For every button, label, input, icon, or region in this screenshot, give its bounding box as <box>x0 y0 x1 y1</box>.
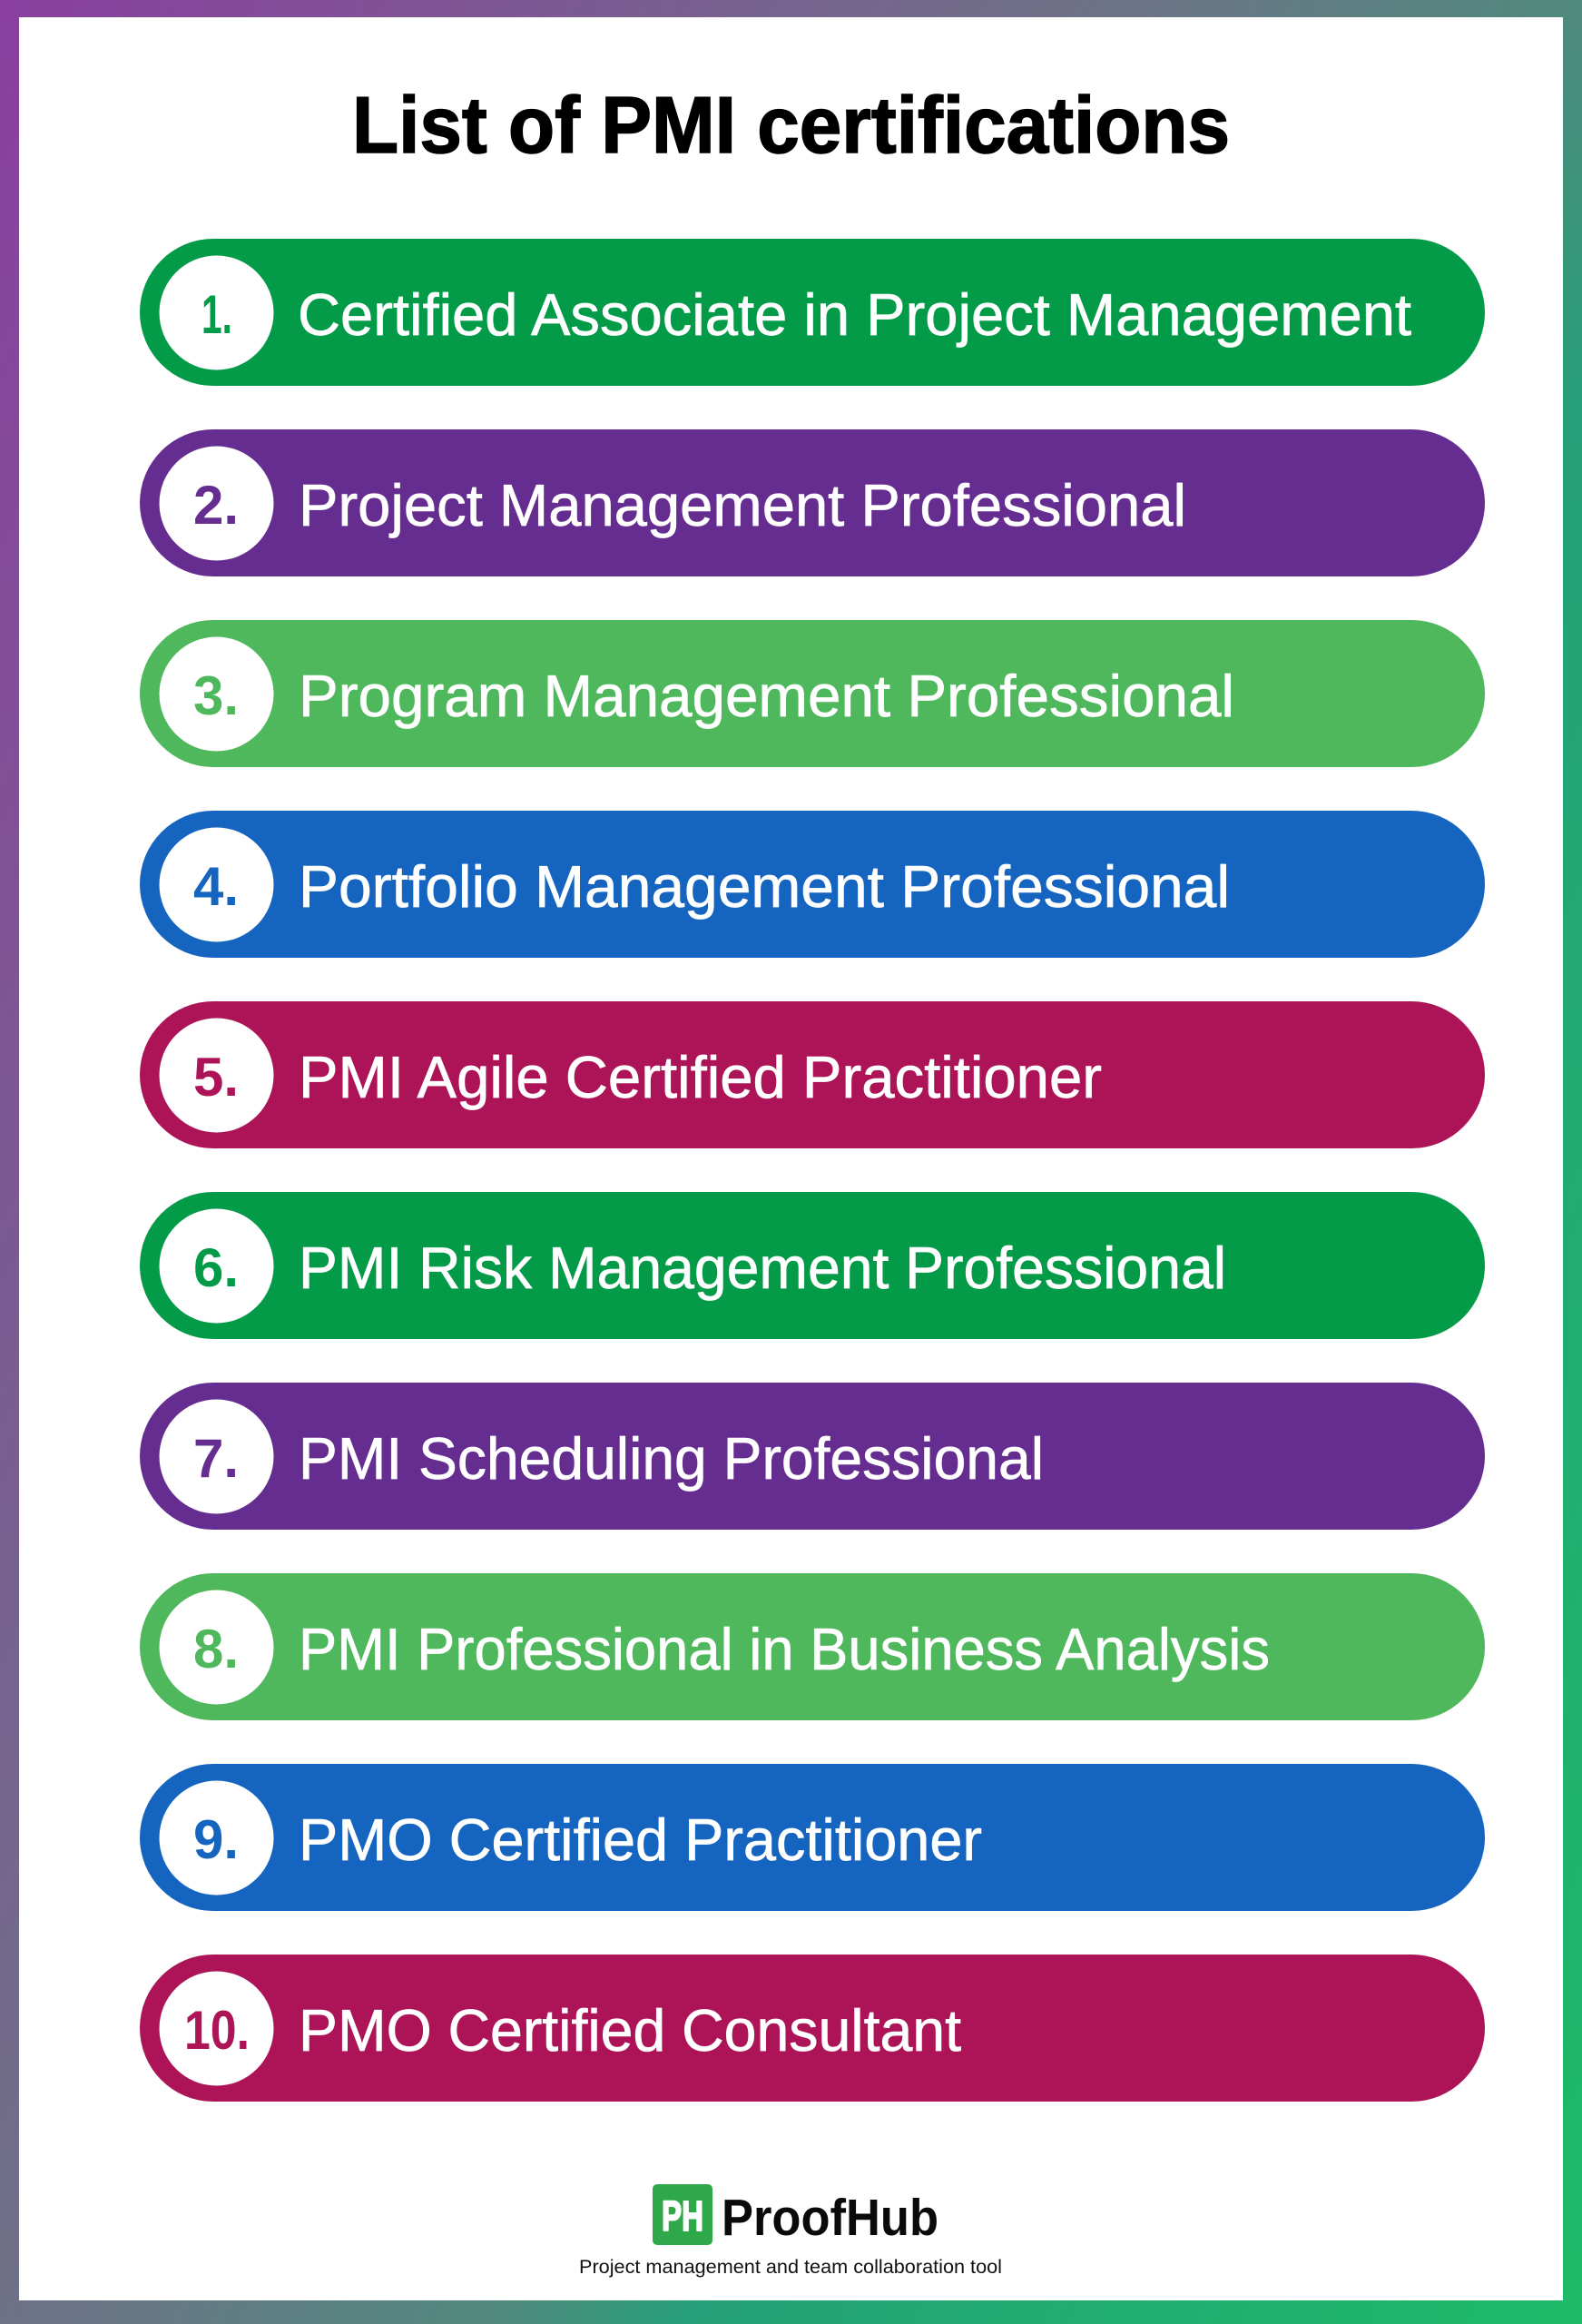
brand name: ProofHub <box>722 2189 938 2247</box>
list item 8: 8. <box>193 1619 239 1679</box>
list item 7: PMI Scheduling Professional <box>299 1425 1044 1492</box>
list item 5: 5. <box>193 1047 239 1108</box>
list item 2: Project Management Professional <box>299 472 1186 538</box>
list item 8 <box>140 1573 1485 1720</box>
list item 6: PMI Risk Management Professional <box>299 1235 1226 1301</box>
list item 6: 6. <box>193 1237 239 1298</box>
list item 4: 4. <box>193 856 239 917</box>
list item 3: 3. <box>193 665 239 726</box>
list item 8: PMI Professional in Business Analysis <box>299 1616 1270 1682</box>
list item 10: 10. <box>184 2000 250 2061</box>
list item 9: 9. <box>193 1809 239 1870</box>
title: List of PMI certifications <box>352 80 1230 170</box>
list item 5: PMI Agile Certified Practitioner <box>299 1044 1102 1110</box>
list item 3: Program Management Professional <box>299 663 1234 729</box>
list item 3 <box>140 620 1485 767</box>
list item 1 <box>140 239 1485 386</box>
list item 7 <box>140 1383 1485 1530</box>
list item 7: 7. <box>193 1428 239 1489</box>
list item 10 <box>140 1955 1485 2102</box>
list item 5 <box>140 1001 1485 1148</box>
list item 6 <box>140 1192 1485 1339</box>
icon: ProofHub logo mark: PH <box>662 2192 703 2240</box>
list item 2 <box>140 429 1485 576</box>
list item 10: PMO Certified Consultant <box>299 1997 961 2063</box>
list item 1: 1. <box>201 284 232 345</box>
list item 2: 2. <box>193 475 239 536</box>
list item 4: Portfolio Management Professional <box>299 853 1230 920</box>
icon: ProofHub logo mark <box>653 2184 712 2245</box>
list item 4 <box>140 811 1485 958</box>
list item 9: PMO Certified Practitioner <box>299 1807 982 1873</box>
tagline: Project management and team collaboration tool <box>579 2257 1002 2278</box>
list item 9 <box>140 1764 1485 1911</box>
list item 1: Certified Associate in Project Management <box>298 281 1411 348</box>
